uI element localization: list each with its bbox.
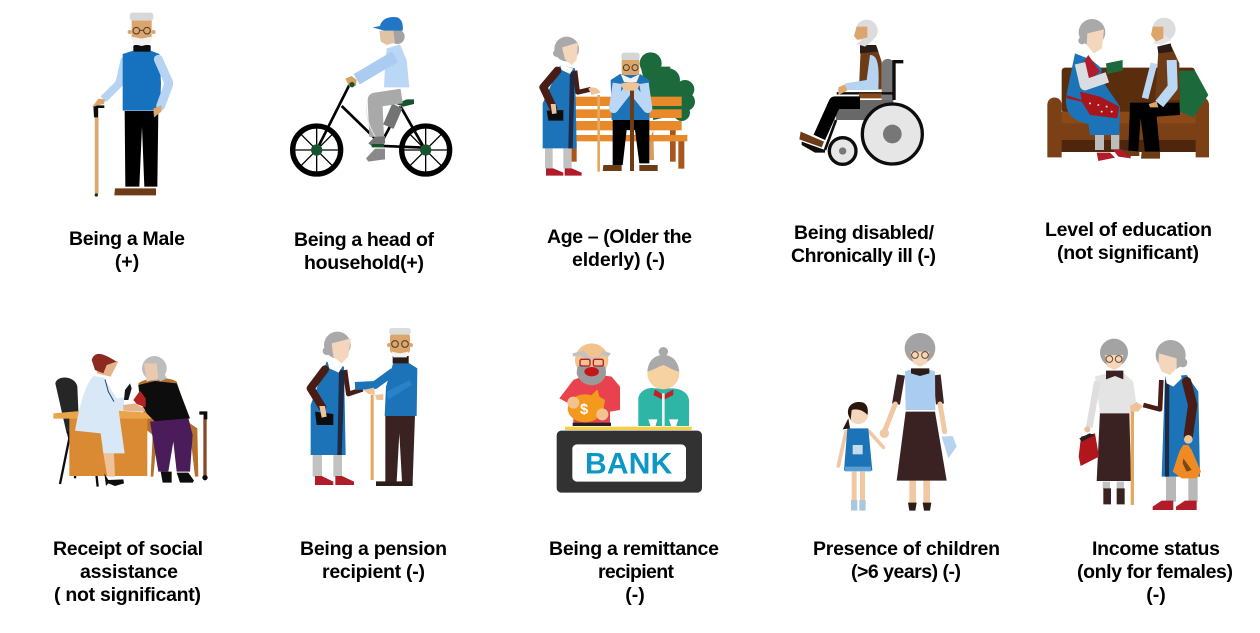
label: household(+) (304, 252, 424, 274)
icon: couple on a sofa (1047, 18, 1209, 161)
label: Chronically ill (-) (791, 245, 936, 267)
label: assistance (80, 561, 178, 583)
panel: social assistance (53, 354, 208, 606)
icon: two elderly women with bags (1079, 339, 1201, 510)
icon: elderly couple at a bench (543, 37, 695, 176)
label: Being disabled/ (794, 222, 935, 244)
label: elderly) (-) (572, 249, 665, 271)
label: (>6 years) (-) (851, 561, 961, 583)
panel: age (543, 37, 695, 271)
label (547, 226, 692, 271)
label (300, 538, 447, 583)
icon: elder in wheelchair (799, 20, 922, 164)
label (294, 229, 434, 274)
label: Receipt of social (53, 538, 203, 560)
label: Presence of children (813, 538, 1000, 560)
label: (-) (1146, 584, 1166, 606)
label (791, 222, 936, 267)
panel: disabled (791, 20, 936, 267)
panel: remittance recipient (549, 343, 719, 606)
label: (-) (625, 584, 645, 606)
label: (+) (115, 251, 139, 273)
icon: elderly couple walking (311, 328, 417, 486)
label: ( not significant) (54, 584, 201, 606)
label (1077, 538, 1233, 606)
label (53, 538, 203, 606)
label: Being a pension (300, 538, 447, 560)
label (69, 228, 185, 273)
label: (only for females) (1077, 561, 1233, 583)
label: Age – (Older the (547, 226, 692, 248)
label: Being a Male (69, 228, 185, 250)
label: Being a head of (294, 229, 434, 251)
icon: couple at a bank counter: $ (580, 402, 588, 418)
icon: old man with cane (92, 13, 169, 197)
label (549, 538, 719, 606)
label: recipient (598, 561, 674, 583)
panel: level of education (1045, 18, 1212, 264)
label: recipient (-) (322, 561, 425, 583)
icon: elder on a bicycle (293, 17, 450, 174)
icon: couple at a bank counter (557, 343, 702, 493)
label (813, 538, 1000, 583)
panel: pension recipient (300, 328, 447, 583)
label: (not significant) (1057, 242, 1199, 264)
panel: presence of children (813, 333, 1000, 583)
icon: couple at a bank counter: BANK (585, 447, 673, 480)
label (1045, 219, 1212, 264)
icon: doctor with patient at desk (53, 354, 208, 487)
panel: being a male (69, 13, 185, 273)
label: Level of education (1045, 219, 1212, 241)
label: Income status (1092, 538, 1220, 560)
panel: income status (1077, 339, 1233, 606)
label: Being a remittance (549, 538, 719, 560)
icon: grandmother and child (838, 333, 957, 511)
panel: head of household (293, 17, 450, 274)
